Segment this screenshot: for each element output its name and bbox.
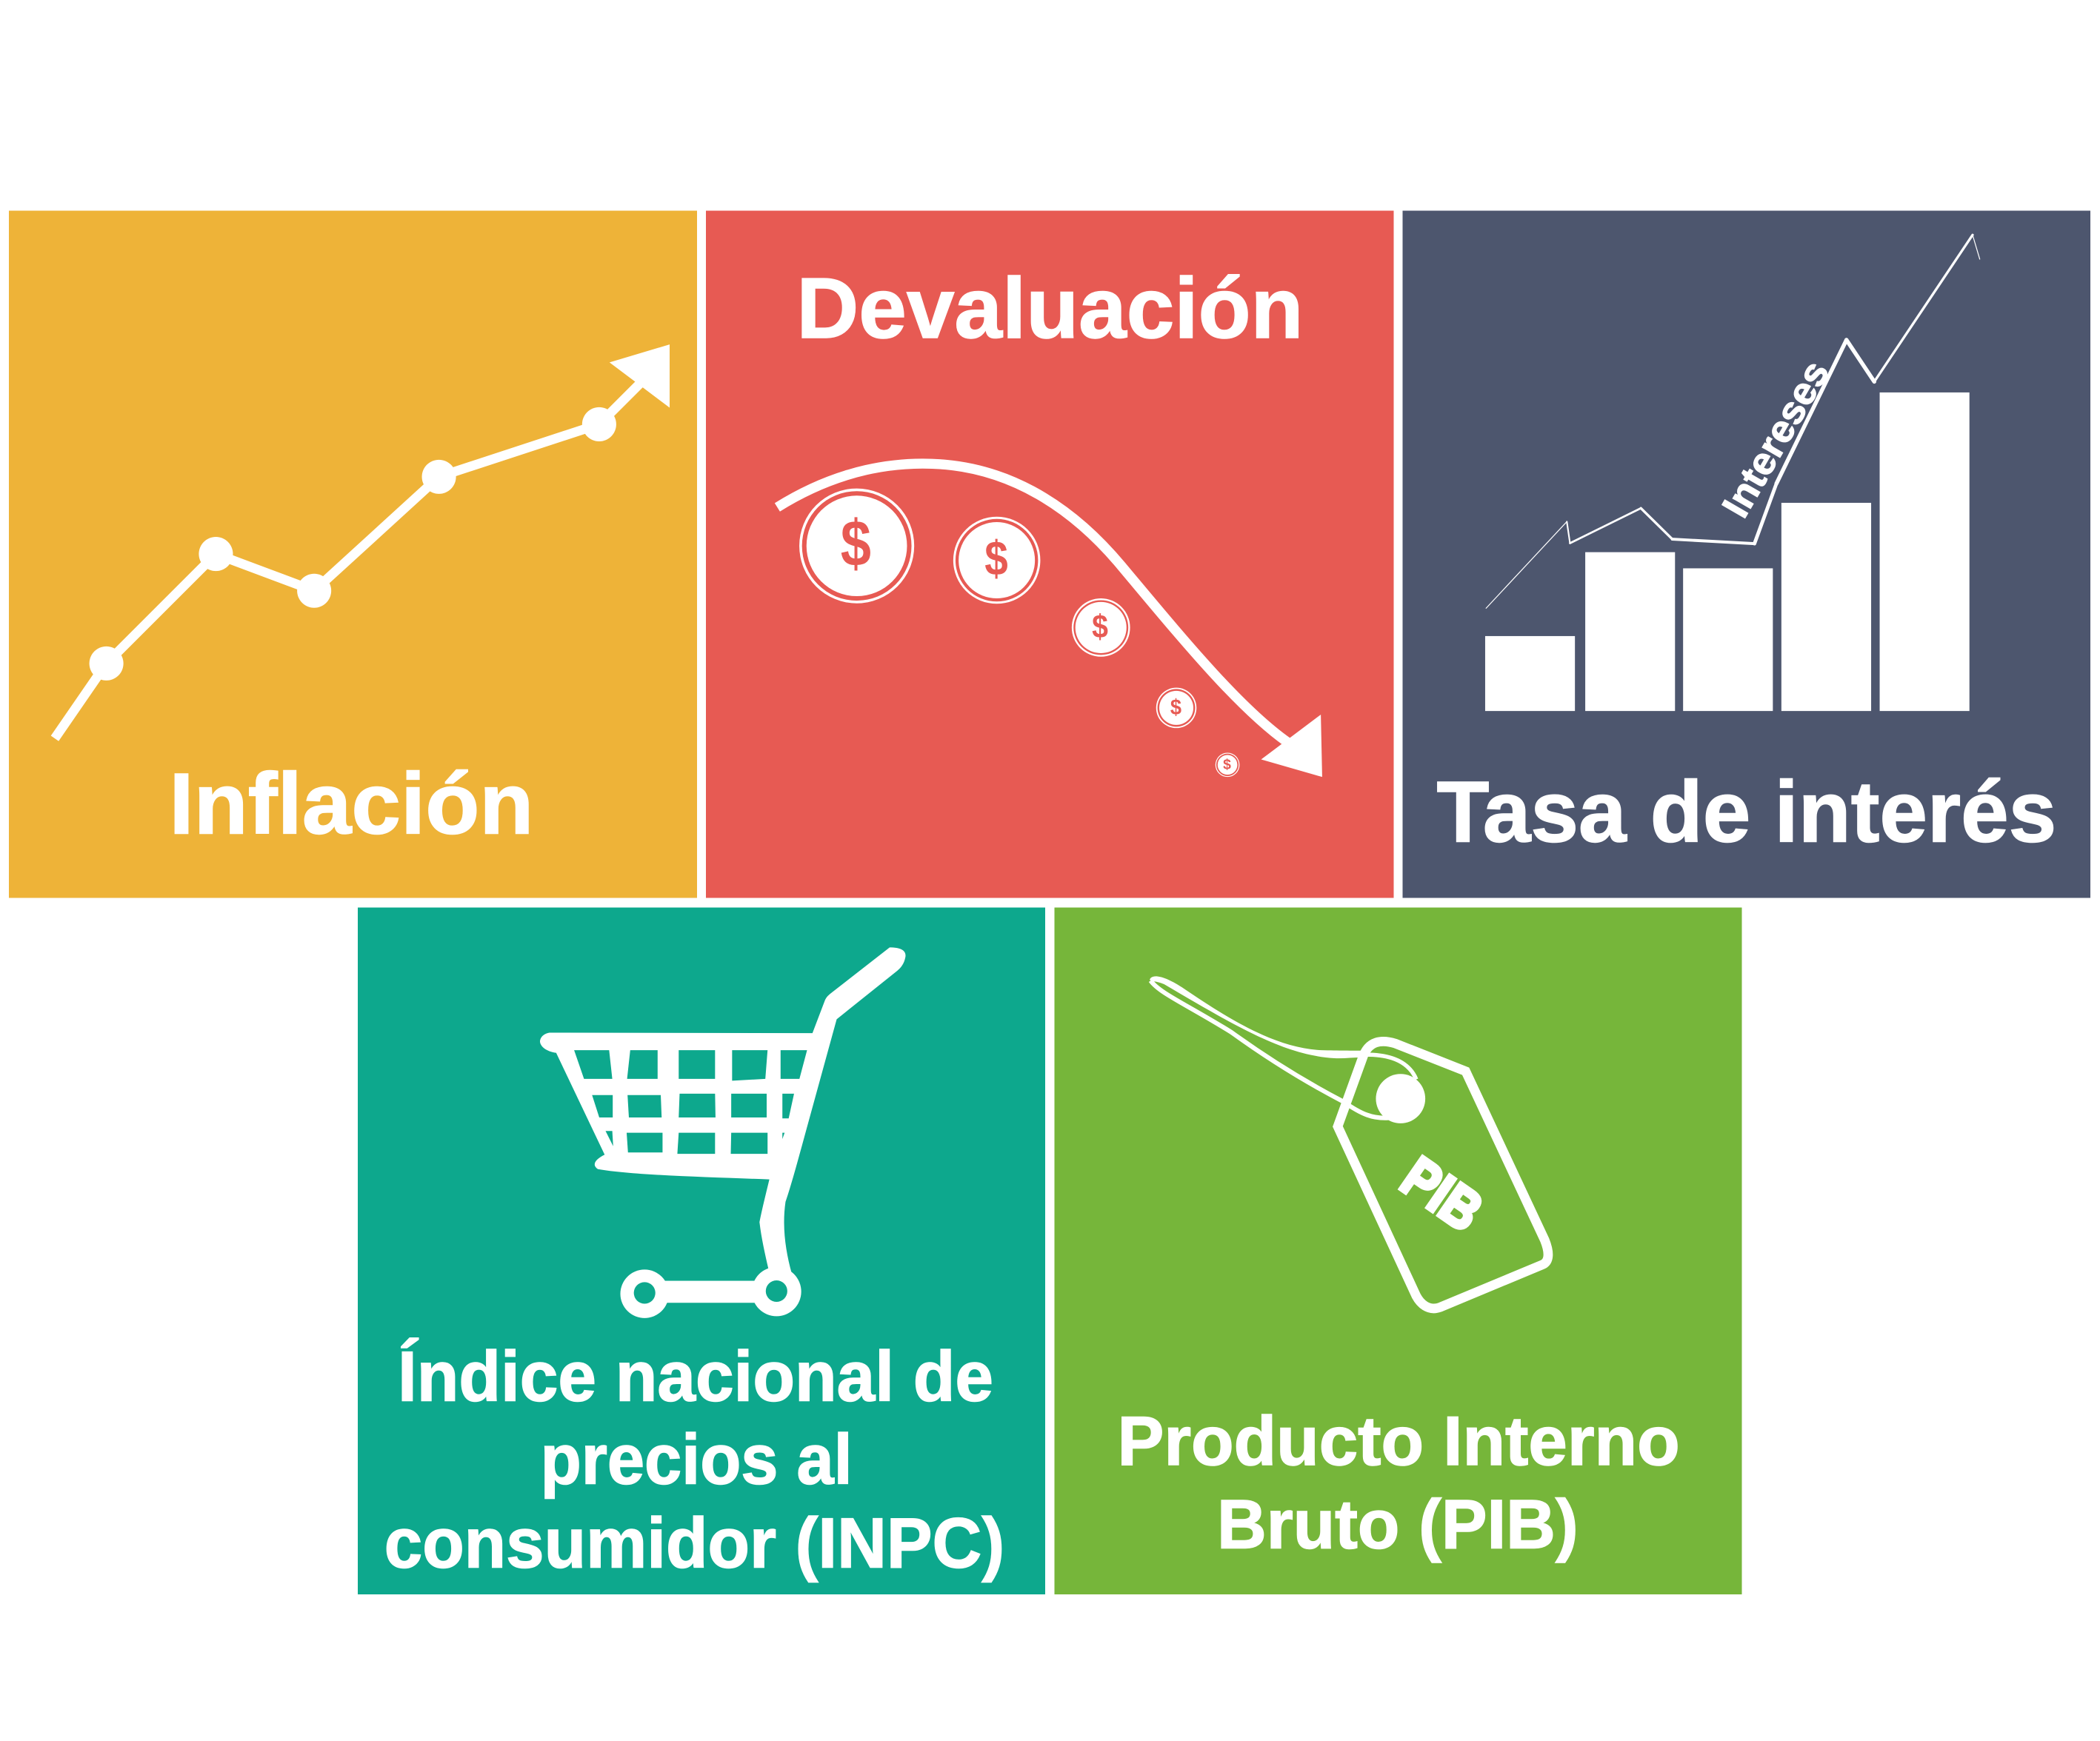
icon: shopping cart — [540, 947, 905, 1318]
line chart with rising arrow — [55, 344, 670, 738]
heading: Inflación: Inflación — [169, 755, 533, 852]
heading: Índice nacional de precios al consumidor (INPC): precios al — [541, 1420, 853, 1499]
label: PIB on tag: PIB — [1390, 1145, 1493, 1244]
heading: Devaluación: Devaluación — [796, 260, 1303, 356]
icon: shrinking dollar coins: $ — [1092, 607, 1108, 645]
panel: PIB — [1055, 908, 1742, 1594]
panel: Devaluación — [706, 210, 1394, 898]
heading: Producto Interno Bruto (PIB): Bruto (PIB) — [1217, 1486, 1579, 1563]
icon: price tag with string — [1150, 976, 1548, 1309]
heading: Índice nacional de precios al consumidor (INPC): Índice nacional de — [398, 1337, 993, 1416]
heading: Índice nacional de precios al consumidor (INPC) — [384, 1337, 1004, 1583]
panel: Tasa de interés — [1403, 210, 2090, 898]
falling curve arrow — [777, 464, 1322, 777]
heading: Índice nacional de precios al consumidor (INPC): consumidor (INPC) — [384, 1504, 1004, 1583]
icon: shrinking dollar coins — [799, 489, 1239, 777]
heading: Producto Interno Bruto (PIB) — [1117, 1402, 1680, 1563]
label: Intereses: Intereses — [1714, 354, 1838, 525]
icon: shrinking dollar coins: $ — [841, 507, 871, 580]
icon: shrinking dollar coins: $ — [1223, 756, 1231, 772]
icon: shrinking dollar coins: $ — [984, 532, 1008, 586]
bar chart — [1485, 392, 1970, 711]
rising interest line — [1486, 235, 1980, 608]
heading: Producto Interno Bruto (PIB): Producto Interno — [1117, 1402, 1680, 1480]
panel: INPC — [358, 908, 1045, 1594]
icon: shrinking dollar coins: $ — [1170, 695, 1181, 720]
heading: Tasa de interés: Tasa de interés — [1437, 763, 2056, 860]
panel: Inflación — [9, 210, 697, 898]
